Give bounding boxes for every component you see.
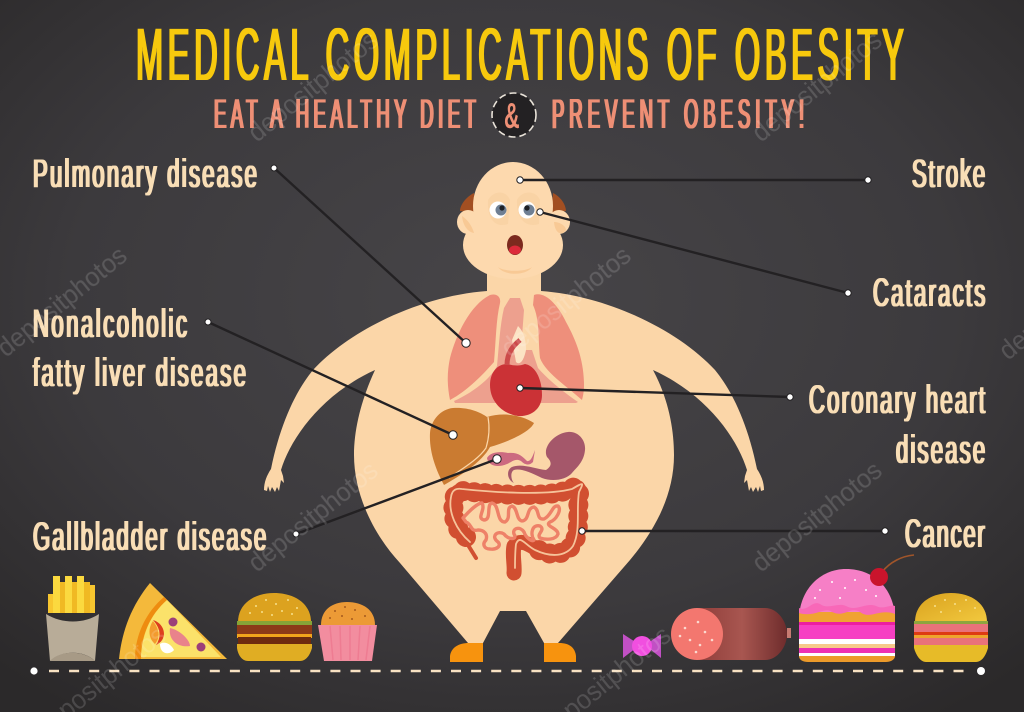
stomach	[508, 432, 585, 483]
watermarks: depositphotos	[746, 455, 888, 578]
labels: Gallbladder disease	[33, 514, 266, 559]
food: sausage	[671, 608, 791, 660]
title: MEDICAL COMPLICATIONS OF OBESITY	[136, 14, 904, 97]
food: fries	[46, 576, 99, 661]
ampersand badge	[492, 93, 536, 137]
labels: disease	[896, 427, 985, 472]
watermarks: depositphotos	[242, 25, 384, 148]
trachea gap	[512, 326, 526, 363]
figure: obese man	[264, 162, 764, 662]
leader: cataracts	[540, 212, 848, 293]
watermarks: depositphotos	[495, 240, 637, 363]
leader: fatty liver	[208, 322, 453, 435]
liver	[430, 408, 534, 485]
shoes	[450, 643, 576, 662]
leader: gallbladder	[296, 459, 497, 534]
labels: Stroke	[912, 151, 985, 196]
food: cake	[799, 555, 914, 662]
food: muffin	[318, 602, 377, 661]
labels	[33, 151, 985, 559]
body and arms	[264, 270, 764, 643]
mouth	[507, 235, 523, 255]
food: pizza	[119, 583, 227, 659]
leader dots	[205, 165, 888, 537]
subtitle	[214, 90, 804, 137]
leader: cancer	[582, 530, 885, 532]
labels: Cataracts	[873, 270, 985, 315]
labels: fatty liver disease	[33, 350, 246, 395]
subtitle: PREVENT OBESITY!	[552, 90, 804, 137]
hair	[460, 193, 566, 213]
lungs	[448, 294, 584, 403]
watermarks: depositphotos	[746, 25, 888, 148]
gallbladder and duct	[487, 450, 535, 466]
eyes	[490, 202, 536, 218]
colon	[450, 484, 582, 573]
subtitle: EAT A HEALTHY DIET	[214, 90, 476, 137]
food: burger	[237, 593, 312, 661]
heart	[490, 340, 542, 416]
ear and cheek shade	[462, 216, 566, 274]
small intestine	[463, 503, 559, 549]
labels: Nonalcoholic	[33, 301, 187, 346]
labels: Pulmonary disease	[33, 151, 257, 196]
labels: Coronary heart	[809, 377, 985, 422]
food: burger right	[914, 593, 988, 662]
leader: stroke	[520, 179, 868, 181]
ampersand badge: &	[504, 96, 520, 136]
leader: coronary heart	[520, 388, 790, 397]
food: candy	[623, 634, 661, 658]
labels: Cancer	[905, 511, 985, 556]
head	[457, 162, 570, 279]
watermarks: depositphotos	[242, 455, 384, 578]
baseline	[30, 667, 985, 675]
leader: pulmonary disease	[273, 167, 466, 343]
